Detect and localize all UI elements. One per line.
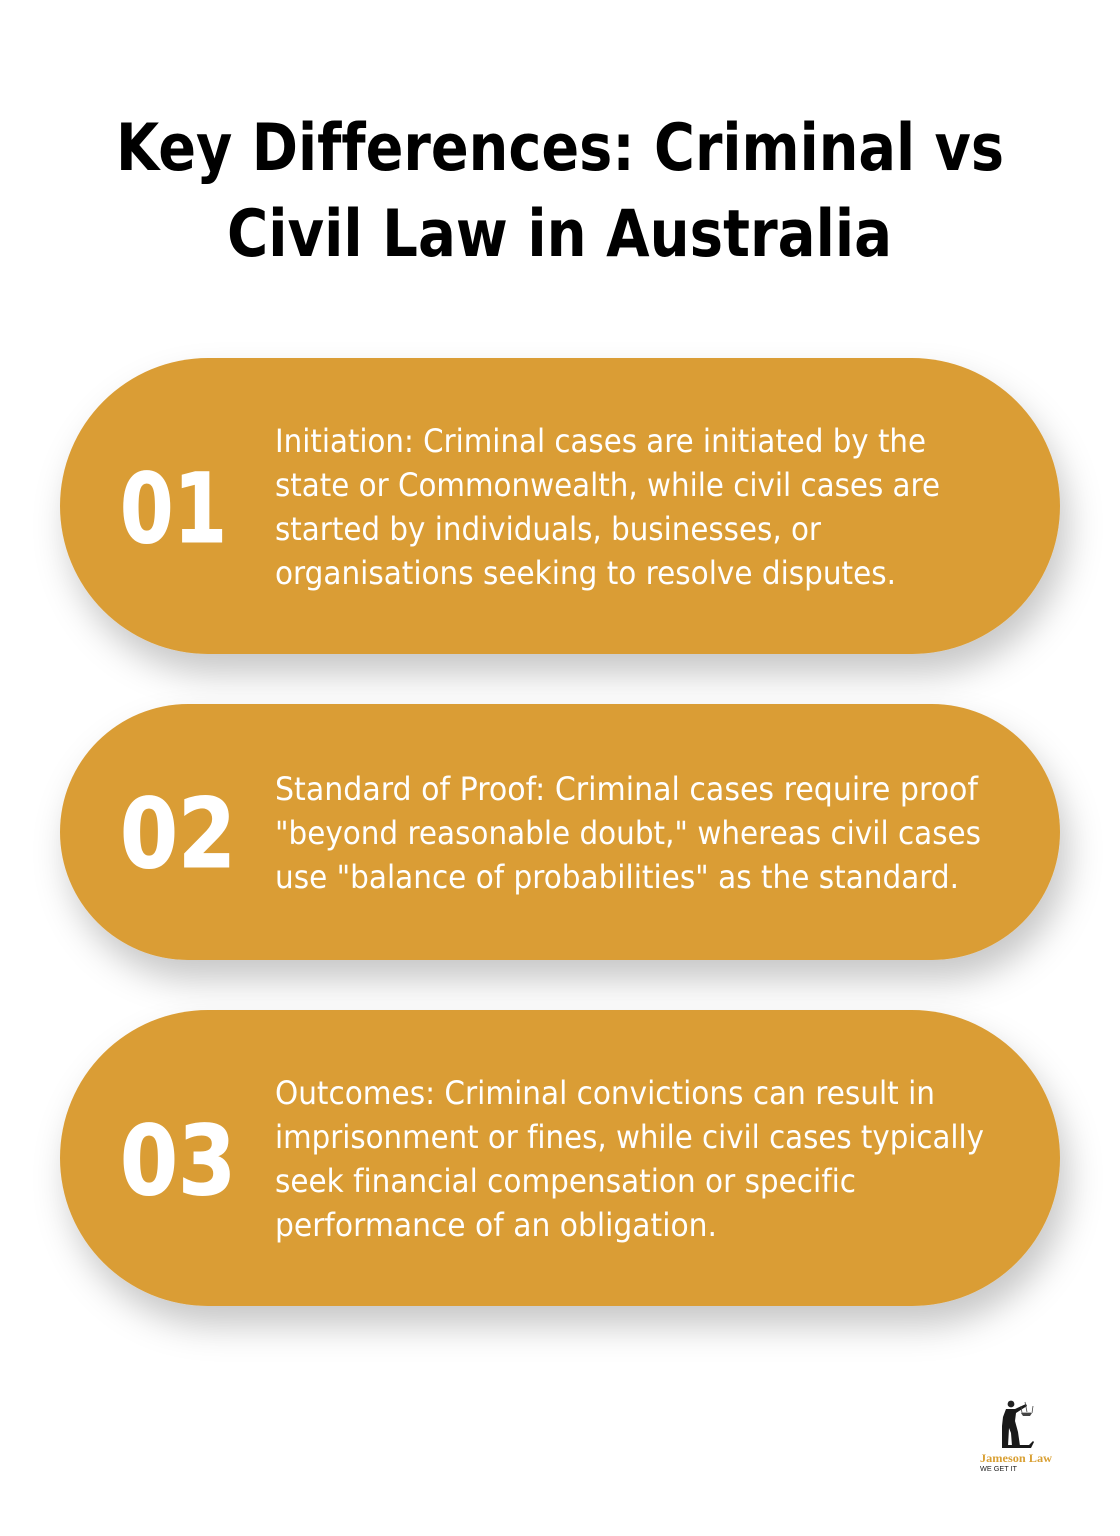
text: initiation: state or Commonwealth, while civil cases are <box>275 466 940 504</box>
icon: lady justice <box>1002 1401 1034 1448</box>
title: Civil Law in Australia <box>227 197 892 272</box>
text: initiation: Initiation: Criminal cases are initiated by the <box>275 422 926 460</box>
text: standard of proof: use "balance of probabilities" as the standard. <box>275 858 959 896</box>
text: initiation: organisations seeking to resolve disputes. <box>275 554 896 592</box>
text: standard of proof: Standard of Proof: Criminal cases require proof <box>275 770 979 808</box>
number 01: 01 <box>120 453 227 565</box>
logo: Jameson Law <box>980 1401 1053 1473</box>
number 02: 02 <box>120 778 236 890</box>
text: initiation: started by individuals, businesses, or <box>275 510 822 548</box>
text: outcomes: imprisonment or fines, while civil cases typically <box>275 1118 984 1156</box>
text: standard of proof <box>275 770 981 896</box>
text: initiation <box>275 422 940 592</box>
text: outcomes <box>275 1074 984 1244</box>
title <box>116 111 1004 272</box>
panel: initiation <box>60 358 1060 654</box>
panel: standard of proof <box>60 704 1060 960</box>
tagline: WE GET IT <box>980 1466 1018 1473</box>
brand name: Jameson Law <box>980 1453 1053 1465</box>
text: standard of proof: "beyond reasonable doubt," whereas civil cases <box>275 814 981 852</box>
text: outcomes: Outcomes: Criminal convictions can result in <box>275 1074 935 1112</box>
panel: outcomes <box>60 1010 1060 1306</box>
text: outcomes: performance of an obligation. <box>275 1206 717 1244</box>
text: outcomes: seek financial compensation or specific <box>275 1162 856 1200</box>
number 03: 03 <box>120 1105 236 1217</box>
